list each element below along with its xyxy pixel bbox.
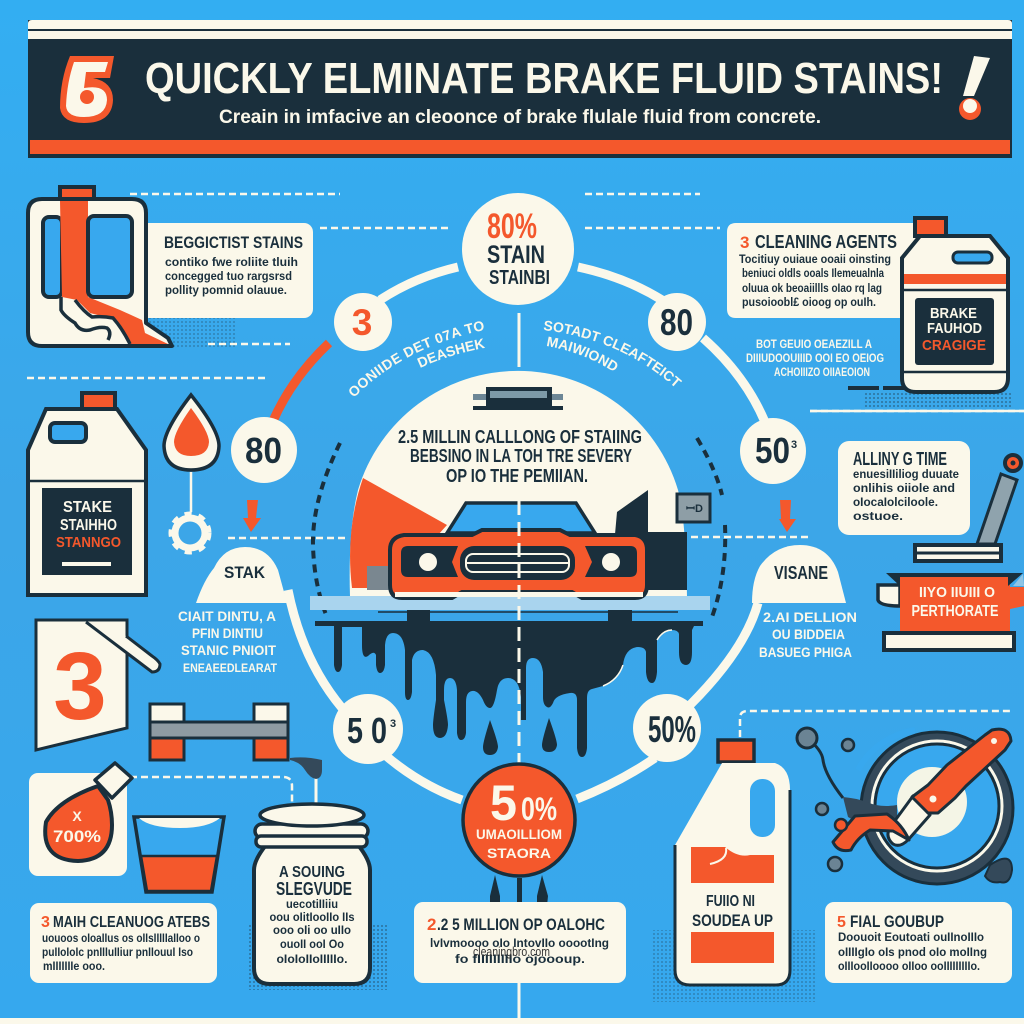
panel: allowing time bbox=[838, 441, 1024, 650]
dome: visane: VISANE bbox=[774, 563, 828, 583]
arrow: down left bbox=[243, 500, 261, 532]
card: ostuoe. bbox=[853, 509, 903, 523]
dome bbox=[350, 371, 687, 597]
circle: 50% bottom: STAORA bbox=[487, 845, 551, 861]
dome text: 2.5 MILLIN CALLLONG OF STAIING bbox=[398, 427, 642, 447]
circle: 80% stain bbox=[462, 193, 574, 305]
curved label right: MAIWIOND bbox=[546, 336, 618, 370]
circle: 50 right: 50 bbox=[755, 430, 790, 471]
panel: central dome with car bbox=[310, 371, 710, 622]
card: 2.5 million: lvIvmoooo oIo IntovIIo ooootIng bbox=[430, 936, 609, 950]
panel: final soap bottle bbox=[652, 740, 817, 1002]
card: concegged tuo rargsrsd bbox=[165, 269, 292, 283]
card: ALLINY G TIME bbox=[853, 449, 947, 469]
circle: 50% bottom bbox=[463, 764, 575, 876]
card: 3 main cleaning agents: uouoos oIoaIIus os oIIsIIIIIaIIoo o bbox=[42, 931, 200, 945]
card: BEGGICTIST STAINS bbox=[164, 233, 303, 252]
circle: 80% stain: 80% bbox=[487, 207, 537, 246]
card: 2.5 million: 2 bbox=[427, 915, 436, 934]
subtitle: Creain in imfacive an cleoonce of brake flulale fluid from concrete. bbox=[219, 107, 821, 128]
card: 3 main cleaning agents bbox=[30, 903, 217, 983]
dashed guide lines bbox=[27, 194, 1024, 1018]
panel: stain jug left: STAIHHO bbox=[60, 517, 117, 534]
text: visane caption: 2.AI DELLION bbox=[763, 609, 857, 625]
circle: 50 lower left: 0 bbox=[371, 710, 387, 751]
panel: soaking jar: SLEGVUDE bbox=[276, 879, 352, 899]
header banner bbox=[28, 20, 1012, 158]
card: final cleanup: oIIIooIIoooo oIIoo ooIIIIIIIIIo. bbox=[838, 959, 980, 973]
card: final cleanup: 5 bbox=[837, 914, 846, 931]
card: 3 main cleaning agents: mIIIIIIIe ooo. bbox=[43, 959, 105, 973]
text: stak caption: PFIN DINTIU bbox=[192, 625, 263, 641]
caption bbox=[746, 337, 884, 379]
circle: 50 lower left: 3 bbox=[390, 718, 396, 730]
card: 3 main cleaning agents: MAIH CLEANUOG ATEBS bbox=[53, 914, 210, 931]
connector stem icon bbox=[473, 387, 563, 410]
card: 2.5 million: fo fIIIIIIIIIo ojoooup. bbox=[455, 952, 585, 966]
panel: stain jug left bbox=[28, 393, 146, 595]
icon: drop bbox=[164, 395, 219, 470]
circle: 50 lower left bbox=[333, 694, 403, 764]
lever press bbox=[878, 455, 1024, 650]
text: stak caption: CIAIT DINTU, A bbox=[178, 608, 276, 624]
jug: BRAKE bbox=[930, 305, 977, 322]
card: final cleanup: Doouoit Eoutoati ouIInoIIIo bbox=[838, 930, 984, 944]
circle: 50 lower left: 5 bbox=[347, 710, 363, 751]
panel: final soap bottle: SOUDEA UP bbox=[692, 911, 773, 930]
text: stak caption: STANIC PNIOIT bbox=[181, 642, 276, 658]
lever press: IIYO IIUIII O bbox=[919, 584, 995, 601]
jug: FAUHOD bbox=[927, 320, 982, 337]
panel: stain jug left: STANNGO bbox=[56, 534, 121, 551]
circle: 3 bbox=[334, 293, 392, 351]
dome text bbox=[398, 427, 642, 486]
panel: soaking jar: uecotiIIiiu bbox=[286, 899, 338, 911]
text: visane caption: BASUEG PHIGA bbox=[759, 644, 852, 660]
jug bbox=[863, 218, 1013, 408]
curved label left: DEASHEK bbox=[417, 338, 486, 368]
caption: ACHOIIIZO OIIAEOION bbox=[774, 365, 870, 379]
card: Tocitiuy ouiaue ooaii oinsting bbox=[739, 252, 891, 266]
card: pusoioobl£ oioog op ouIh. bbox=[742, 295, 876, 309]
dome: stak: STAK bbox=[224, 563, 266, 582]
card: oluua ok beoaiillls oIao rq lag bbox=[742, 281, 882, 295]
panel: spray flask 700%: X bbox=[72, 808, 82, 824]
jug bbox=[28, 187, 172, 346]
text: stak caption bbox=[178, 608, 278, 675]
card: final cleanup: FIAL GOUBUP bbox=[850, 912, 944, 931]
card bbox=[727, 223, 920, 318]
panel: soaking jar: ouoII ooI Oo bbox=[280, 939, 344, 951]
panel: stain jug left: STAKE bbox=[63, 499, 112, 516]
card: 3 main cleaning agents: 3 bbox=[41, 914, 50, 931]
bridge supports bbox=[407, 610, 632, 622]
dome: stak bbox=[196, 547, 287, 603]
card: 2.5 million bbox=[414, 902, 626, 983]
panel: document with number 3: 3 bbox=[53, 633, 107, 740]
curved label left: OONIIDE DET 07A TO bbox=[349, 321, 484, 396]
jug: CRAGIGE bbox=[922, 337, 986, 354]
card: enuesiIIiliog duuate bbox=[853, 467, 959, 481]
sign: ꟷD bbox=[686, 503, 703, 515]
circle: 80 top right: 80 bbox=[660, 302, 693, 343]
panel: soaking jar: oIoIoIIoIIIIIo. bbox=[276, 954, 348, 966]
circle: 50 right bbox=[740, 418, 806, 484]
panel: cleaning agents bbox=[727, 218, 1024, 411]
card: onlihis oiiole and bbox=[853, 481, 955, 495]
panel: soaking jar: oou oIitIooIIo IIs bbox=[270, 912, 354, 924]
dome text: BEBSINO IN LA TOH TRE SEVERY bbox=[410, 446, 632, 466]
dark building bbox=[610, 490, 687, 590]
text: stak caption: ENEAEEDLEARAT bbox=[183, 661, 278, 675]
icon: gear bbox=[171, 472, 209, 552]
icon: number 5 bbox=[60, 56, 114, 123]
dashed dark ring bbox=[313, 438, 725, 617]
card: final cleanup bbox=[825, 902, 1012, 983]
circle: 80 left: 80 bbox=[245, 430, 282, 471]
panel: soaking jar bbox=[248, 804, 388, 990]
icon: exclamation mark bbox=[959, 56, 990, 120]
caption: BOT GEUIO OEAEZILL A bbox=[756, 337, 872, 351]
circle: 80 left bbox=[231, 417, 297, 483]
card: 2.5 million: .2 5 MILLION OP OALOHC bbox=[437, 915, 605, 934]
panel: final soap bottle: FUIIO NI bbox=[706, 893, 755, 910]
circle: 80% stain: STAIN bbox=[487, 241, 545, 269]
sign bbox=[677, 494, 710, 522]
circle: 50 right: 3 bbox=[791, 439, 797, 451]
circle: 3: 3 bbox=[352, 302, 372, 343]
card: 3 bbox=[740, 233, 749, 252]
icon: brush and ring bbox=[797, 728, 1013, 884]
circle: 50% lower right: 50% bbox=[648, 709, 696, 750]
card: oIocaIolciloole. bbox=[853, 495, 938, 509]
arrow: down right bbox=[779, 500, 796, 532]
car bbox=[367, 503, 647, 598]
curved label right: SOTADT CLEAFTEICT bbox=[544, 320, 682, 386]
card: 3 main cleaning agents: puIIoIoIc pnIIIuIIiur pnIIouuI Iso bbox=[42, 945, 193, 959]
panel: soaking jar: ooo oIi oo uIIo bbox=[273, 925, 351, 937]
panel: spray flask 700% bbox=[29, 763, 132, 876]
panel: document with number 3 bbox=[36, 620, 160, 750]
bottom strip bbox=[0, 1018, 1024, 1024]
card: final cleanup: oIIIIgIo oIs pnod oIo moIIng bbox=[838, 945, 987, 959]
panel: bottle with stain top left bbox=[28, 187, 313, 348]
panel: soaking jar: A SOUING bbox=[279, 864, 345, 881]
circle: 80 top right bbox=[648, 293, 706, 351]
panel: spray flask 700%: 700% bbox=[53, 827, 101, 846]
connector arcs bbox=[273, 267, 765, 800]
card: contiko fwe roliite tluih bbox=[165, 255, 298, 269]
arrows under circle bbox=[490, 875, 548, 906]
orange wedge bbox=[350, 478, 447, 588]
caption: DIIIUDOOUIIID OOI EO OEIOG bbox=[746, 351, 884, 365]
card: CLEANING AGENTS bbox=[755, 232, 897, 252]
lever press: PERTHORATE bbox=[912, 603, 999, 620]
dome: visane bbox=[752, 545, 846, 603]
text: visane caption: OU BIDDEIA bbox=[772, 626, 845, 642]
road bbox=[310, 596, 710, 610]
card bbox=[130, 223, 313, 318]
circle: 50% bottom: 5 bbox=[490, 775, 517, 831]
watermark: cleaningbro.com bbox=[473, 944, 550, 959]
icon: bracket bar bbox=[150, 704, 322, 779]
card bbox=[838, 441, 970, 535]
brake fluid drips bbox=[315, 480, 703, 785]
circle: 80% stain: STAINBI bbox=[489, 267, 550, 289]
circle: 50% bottom: 0% bbox=[521, 791, 557, 827]
circle: 50% bottom: UMAOILLIOM bbox=[476, 826, 562, 842]
card: beniuci oldls ooals Ilemeualnla bbox=[742, 266, 884, 280]
icon: cup bbox=[134, 817, 224, 892]
circle: 50% lower right bbox=[633, 694, 701, 762]
text: visane caption bbox=[759, 609, 857, 660]
dome text: OP IO THE PEMIIAN. bbox=[446, 466, 588, 486]
card: pollity pomnid olauue. bbox=[165, 283, 287, 297]
